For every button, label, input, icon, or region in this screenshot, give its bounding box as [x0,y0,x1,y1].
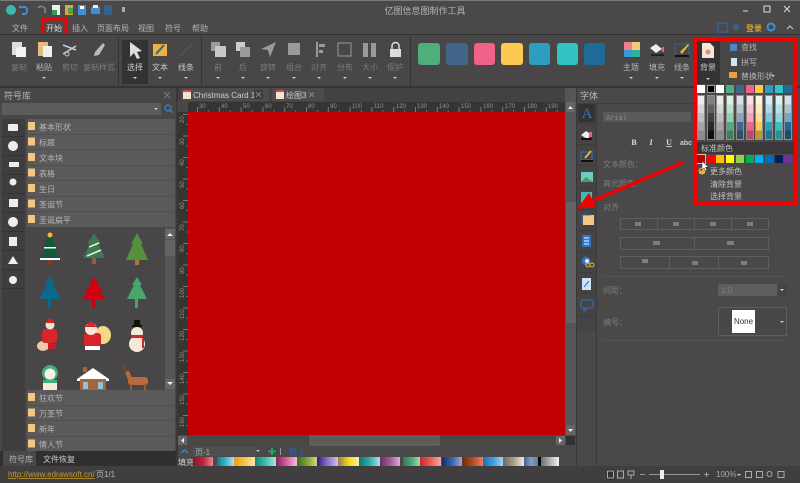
left ruler: 140 [180,373,186,384]
ribbon: 粘贴 [36,62,52,72]
dropdown carets [42,77,710,79]
ribbon: 线条 [674,62,690,72]
document tabs: 绘图3 [286,90,307,100]
more colours option [698,166,742,176]
status bar [0,466,800,483]
text style buttons: I [648,138,653,147]
arrange tools [211,42,401,57]
category icon column [2,119,25,451]
menu bar: 插入 [72,23,88,33]
fill palette label: 填充 [178,457,194,467]
vertical scrollbar [565,88,576,435]
category rows: 标题 [39,138,55,148]
page tabs bar [181,447,305,457]
icon: app logo [6,5,16,15]
left ruler: 130 [180,351,186,362]
category rows: 新年 [39,424,55,434]
category rows: 表格 [39,168,55,178]
left ruler: 20 [180,116,186,123]
icon: fill bucket [581,131,592,140]
highlight colour label: 高光颜色： [603,178,643,188]
icon: reindeer [123,365,148,391]
top ruler: 120 [396,104,407,110]
top ruler: 140 [439,104,450,110]
window controls [743,6,790,12]
top ruler: 150 [461,104,472,110]
left ruler: 80 [180,245,186,252]
icon: snowman with hat [129,320,145,352]
alignment label: 对齐 [603,202,619,212]
text colour label: 文本颜色： [603,159,643,169]
find, spell, replace shape tools: 替换形状 [741,71,773,81]
left ruler: 40 [180,159,186,166]
left ruler [178,112,188,435]
popup: background colour picker [697,86,794,203]
top ruler: 130 [417,104,428,110]
zoom slider [640,470,709,479]
numbering field: None [734,317,754,326]
category rows: 圣诞扁平 [39,215,71,225]
top ruler: 60 [265,104,272,110]
numbering field: 编号： [603,317,627,327]
select background option: 选择背景 [710,191,742,201]
category rows [27,119,175,452]
title bar [0,0,800,35]
top ruler: 170 [505,104,516,110]
left ruler: 60 [180,202,186,209]
icon: green tree [126,233,148,265]
scrollbar: gallery [165,228,175,390]
ribbon: 对齐 [311,62,327,72]
icon: document [582,235,591,247]
icon: picture [581,172,593,182]
category rows: 基本形状 [39,122,71,132]
zoom level: 100% [716,470,736,479]
search box [2,103,173,115]
icon: blue tree [39,276,61,308]
menu bar: 开始 [46,23,62,33]
top ruler: 90 [330,104,337,110]
category rows: 生日 [39,184,55,194]
page tabs bar: 页-1 [289,448,305,457]
category rows: 情人节 [39,440,63,450]
left ruler: 30 [180,138,186,145]
arrow: to red canvas [577,162,684,209]
top ruler: 40 [221,104,228,110]
icon: font A: A [582,106,593,122]
ribbon: 前 [214,62,222,72]
text style buttons [631,138,692,147]
alignment buttons [620,218,768,268]
menu bar: 帮助 [192,23,208,33]
background button [697,40,720,84]
menu bar: 视图 [138,23,154,33]
fit controls [746,472,784,478]
clear background option: 清除背景 [710,179,742,189]
standard colours heading: 标准颜色 [701,143,733,153]
menu bar: 符号 [165,23,181,33]
highlight box: start tab [43,19,66,36]
left ruler: 120 [180,330,186,341]
font name box [603,112,691,123]
icon: santa with sack [37,318,57,351]
top ruler: 30 [199,104,206,110]
ribbon: 大小 [362,62,378,72]
ribbon: 剪切 [62,62,78,72]
palette: theme colour shades [697,95,792,140]
theme, fill, line tools [624,42,689,57]
top ruler: 180 [527,104,538,110]
panel tabs: 文件恢复 [43,454,75,464]
highlight box: background tools [696,40,796,204]
drawing tools [130,42,192,59]
top ruler: 70 [286,104,293,110]
canvas: red background page [188,112,565,435]
ribbon [0,34,800,88]
clipboard tools [12,42,105,57]
numbering field [603,308,786,336]
top ruler: 110 [374,104,384,110]
ribbon: 复制 [11,62,27,72]
heading: font: 字体 [580,90,598,101]
icon: comment [581,300,593,311]
top ruler: 50 [243,104,250,110]
background button: 背景 [700,62,716,72]
left ruler: 110 [180,309,186,319]
find, spell, replace shape tools: 查找 [741,42,757,52]
icon: house [77,367,109,391]
left ruler: 160 [180,416,186,427]
fill colour palette strip [193,457,559,466]
ribbon: 复制样式 [83,62,115,72]
panel tabs [0,451,176,466]
page count: 页1/1 [96,470,116,479]
icon: red tree [82,277,106,308]
icon: layers [581,192,594,225]
font name box: Arial [606,115,627,123]
palette: standard colours [697,154,792,164]
menu bar: 页面布局 [97,23,129,33]
icon: snowy tree [40,232,60,265]
icon: decorated tree [83,233,105,264]
ribbon: 旋转 [260,62,276,72]
document tabs [178,88,576,102]
selected tool highlight [122,40,148,84]
panel tabs: 符号库 [9,454,33,464]
category rows: 圣诞节 [39,200,63,210]
mouse cursor [702,161,708,171]
panel: sidebar icons [576,88,597,466]
theme colour buttons [418,43,605,65]
left ruler: 150 [180,394,186,405]
category rows: 文本块 [39,153,63,163]
text style buttons: abc [680,140,692,147]
top ruler: 80 [308,104,315,110]
view controls [606,469,634,480]
left ruler: 90 [180,267,186,274]
category rows: 万圣节 [39,410,63,418]
ribbon: 线条 [178,62,194,72]
ribbon: 主题 [623,62,639,72]
ribbon: 文本 [152,62,168,72]
left ruler: 70 [180,224,186,231]
top ruler: 100 [352,104,363,110]
ribbon: 后 [239,62,247,72]
account controls: 登录 [746,23,762,33]
category rows: 狂欢节 [39,393,63,403]
top ruler [188,102,565,112]
panel: symbol library [0,88,178,466]
icon: light green tree [127,277,147,308]
page tabs bar: 页-1 [195,448,211,457]
ribbon: 组合 [286,62,302,72]
palette: theme colours top row [697,85,792,93]
panel: font properties [577,90,800,340]
ribbon: 保护 [387,62,403,72]
left ruler: 50 [180,181,186,188]
horizontal scrollbar [178,435,575,446]
more colours option: 更多颜色 [710,166,742,176]
text style buttons: U [666,138,672,147]
spacing field [603,284,787,296]
top ruler: 190 [548,104,559,110]
icon: globe link [582,256,594,267]
ribbon: 填充 [649,62,665,72]
link: http://www.edrawsoft.cn/ [8,470,95,479]
left ruler: 100 [180,287,186,298]
quick access toolbar icons [19,5,125,15]
heading: symbol library: 符号库 [4,90,31,101]
icon: line pen [581,151,593,162]
ribbon: 分布 [337,62,353,72]
find, spell, replace shape tools [729,42,775,81]
menu bar [12,23,208,33]
spacing field: 1.0 [721,286,733,295]
app title: 亿图信息图制作工具 [384,5,466,16]
ruler corner [178,102,188,112]
icon: santa front [84,321,111,350]
icon: green hooded snowman [42,365,58,390]
spacing field: 间距： [603,286,627,295]
top ruler: 160 [483,104,494,110]
text style buttons: B [631,138,637,147]
icon: note [582,278,591,290]
account controls [718,23,793,33]
menu bar: 文件 [12,23,28,33]
document tabs: Christmas Card 1 [193,91,256,100]
ribbon: 选择 [127,62,143,72]
find, spell, replace shape tools: 拼写 [741,57,757,67]
symbol gallery [37,232,148,391]
